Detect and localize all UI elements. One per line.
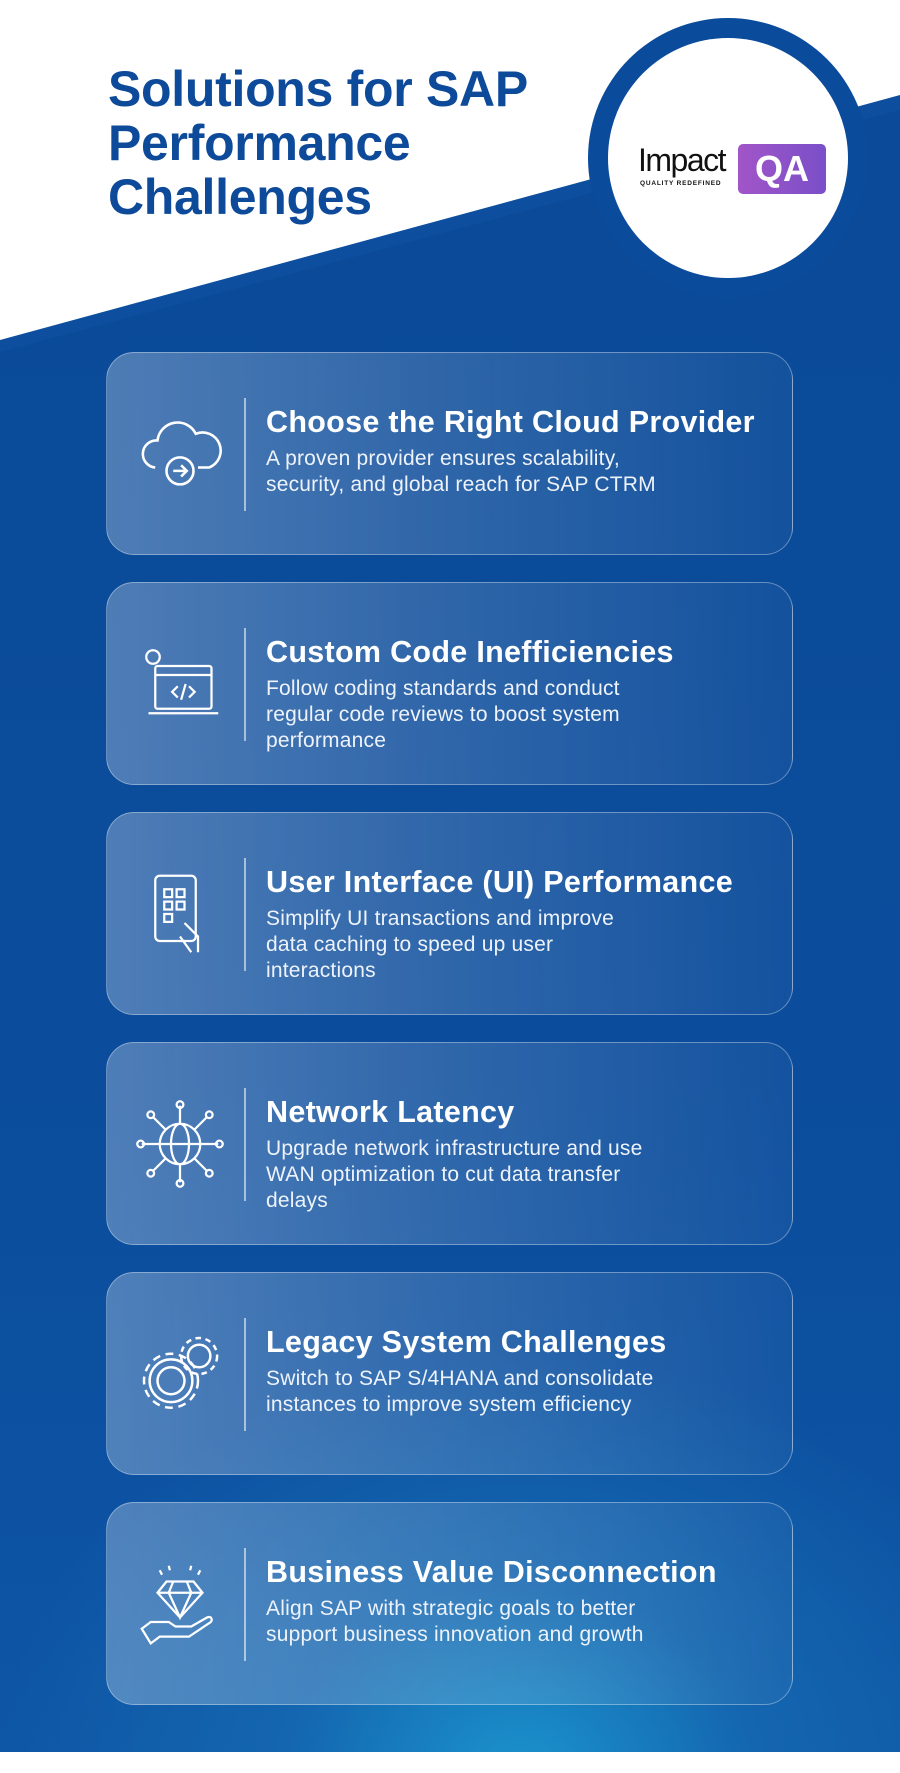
- icon: tablet hand: [154, 874, 200, 953]
- icon: globe network: [136, 1100, 224, 1188]
- card 1: [106, 352, 793, 555]
- card 2: Custom Code Inefficiencies: [266, 635, 674, 669]
- card 2: performance: [266, 729, 386, 752]
- icon: laptop code: [145, 649, 218, 714]
- logo circle: QA: [755, 148, 809, 189]
- card 3: User Interface (UI) Performance: [266, 865, 733, 899]
- logo: ImpactQA: Impact: [638, 142, 725, 178]
- logo circle: [588, 18, 868, 298]
- card 3: Simplify UI transactions and improve: [266, 907, 614, 930]
- icon: diamond hand: [140, 1566, 213, 1645]
- card 3: interactions: [266, 959, 376, 982]
- card 6: Align SAP with strategic goals to better: [266, 1597, 635, 1620]
- card 4: Upgrade network infrastructure and use: [266, 1137, 642, 1160]
- title: Solutions for SAP: [108, 61, 528, 117]
- title: Challenges: [108, 169, 372, 225]
- header white diagonal: [0, 0, 900, 340]
- text: Choose the Right Cloud Provider: [266, 405, 755, 439]
- card 2: [106, 582, 793, 785]
- card 6: [106, 1502, 793, 1705]
- text: security, and global reach for SAP CTRM: [266, 473, 656, 496]
- icon: gears: [142, 1336, 218, 1409]
- card 6: Business Value Disconnection: [266, 1555, 717, 1589]
- card 4: WAN optimization to cut data transfer: [266, 1163, 620, 1186]
- card 4: delays: [266, 1189, 328, 1212]
- card 3: [106, 812, 793, 1015]
- card 6: support business innovation and growth: [266, 1623, 644, 1646]
- card 4: [106, 1042, 793, 1245]
- title: [108, 61, 528, 225]
- text: [266, 405, 755, 496]
- card 5: Legacy System Challenges: [266, 1325, 666, 1359]
- text: A proven provider ensures scalability,: [266, 447, 620, 470]
- card 4: Network Latency: [266, 1095, 515, 1129]
- logo circle: QUALITY REDEFINED: [640, 180, 721, 187]
- card 5: instances to improve system efficiency: [266, 1393, 632, 1416]
- card 5: Switch to SAP S/4HANA and consolidate: [266, 1367, 654, 1390]
- bottom white strip: [0, 1752, 900, 1773]
- icon: cloud: [142, 421, 222, 486]
- title: Performance: [108, 115, 410, 171]
- card 2: regular code reviews to boost system: [266, 703, 620, 726]
- card 3: data caching to speed up user: [266, 933, 553, 956]
- card 2: Follow coding standards and conduct: [266, 677, 620, 700]
- card 5: [106, 1272, 793, 1475]
